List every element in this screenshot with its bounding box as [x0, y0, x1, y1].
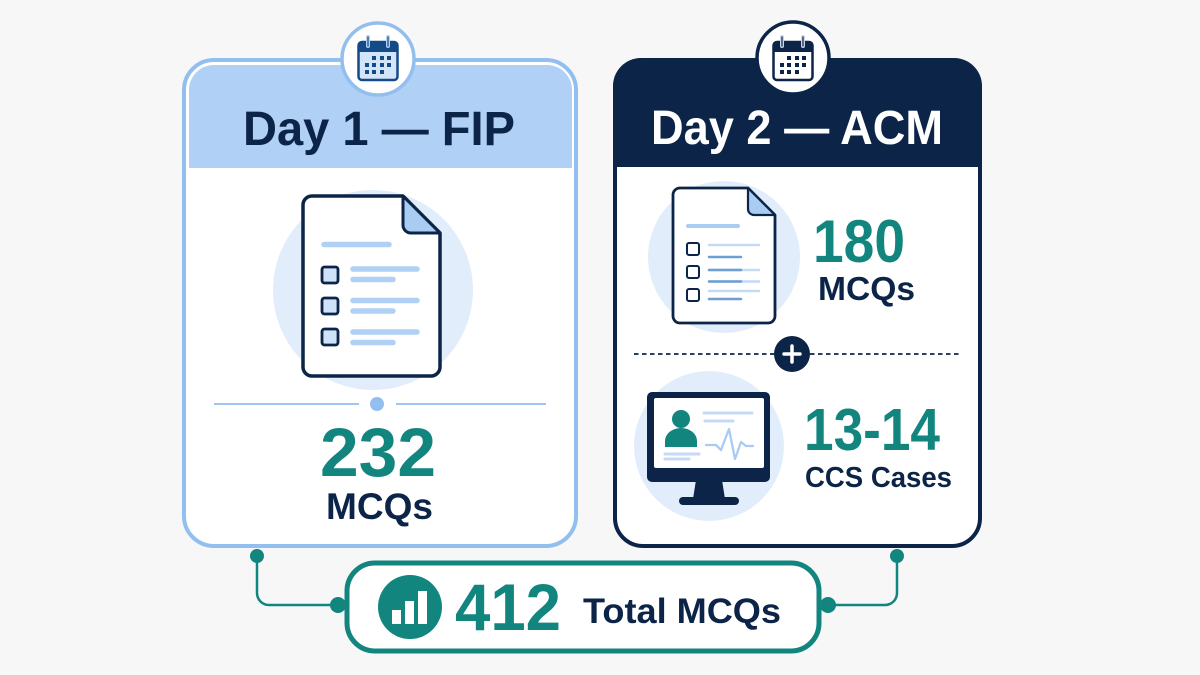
total count: 412 — [455, 570, 561, 644]
total label: Total MCQs — [583, 592, 781, 631]
left connector — [250, 549, 346, 613]
day 2 header band — [613, 58, 982, 167]
day 1 label: MCQs — [326, 486, 433, 527]
day 2 heading: Day 2 — ACM — [651, 102, 943, 155]
CCS label: CCS Cases — [805, 462, 952, 494]
total callout — [347, 563, 819, 651]
icon: day 1 calendar — [342, 23, 414, 95]
panel: day 1 FIP — [184, 23, 576, 546]
day 1 divider — [214, 397, 546, 411]
icon: day 2 question sheet — [648, 181, 800, 333]
panel: day 2 ACM — [613, 22, 982, 546]
icon: bar chart badge — [378, 575, 442, 639]
MCQ label: MCQs — [818, 270, 915, 307]
day 1 header band — [189, 65, 572, 168]
day 1 heading: Day 1 — FIP — [243, 103, 515, 156]
icon: day 2 calendar — [757, 22, 829, 94]
icon: day 1 question sheet — [273, 190, 473, 390]
icon: CCS monitor — [634, 371, 784, 521]
day 1 count: 232 — [320, 414, 436, 491]
MCQ count: 180 — [813, 208, 905, 275]
CCS count: 13-14 — [804, 397, 940, 463]
plus divider — [634, 336, 962, 372]
right connector — [820, 549, 904, 613]
